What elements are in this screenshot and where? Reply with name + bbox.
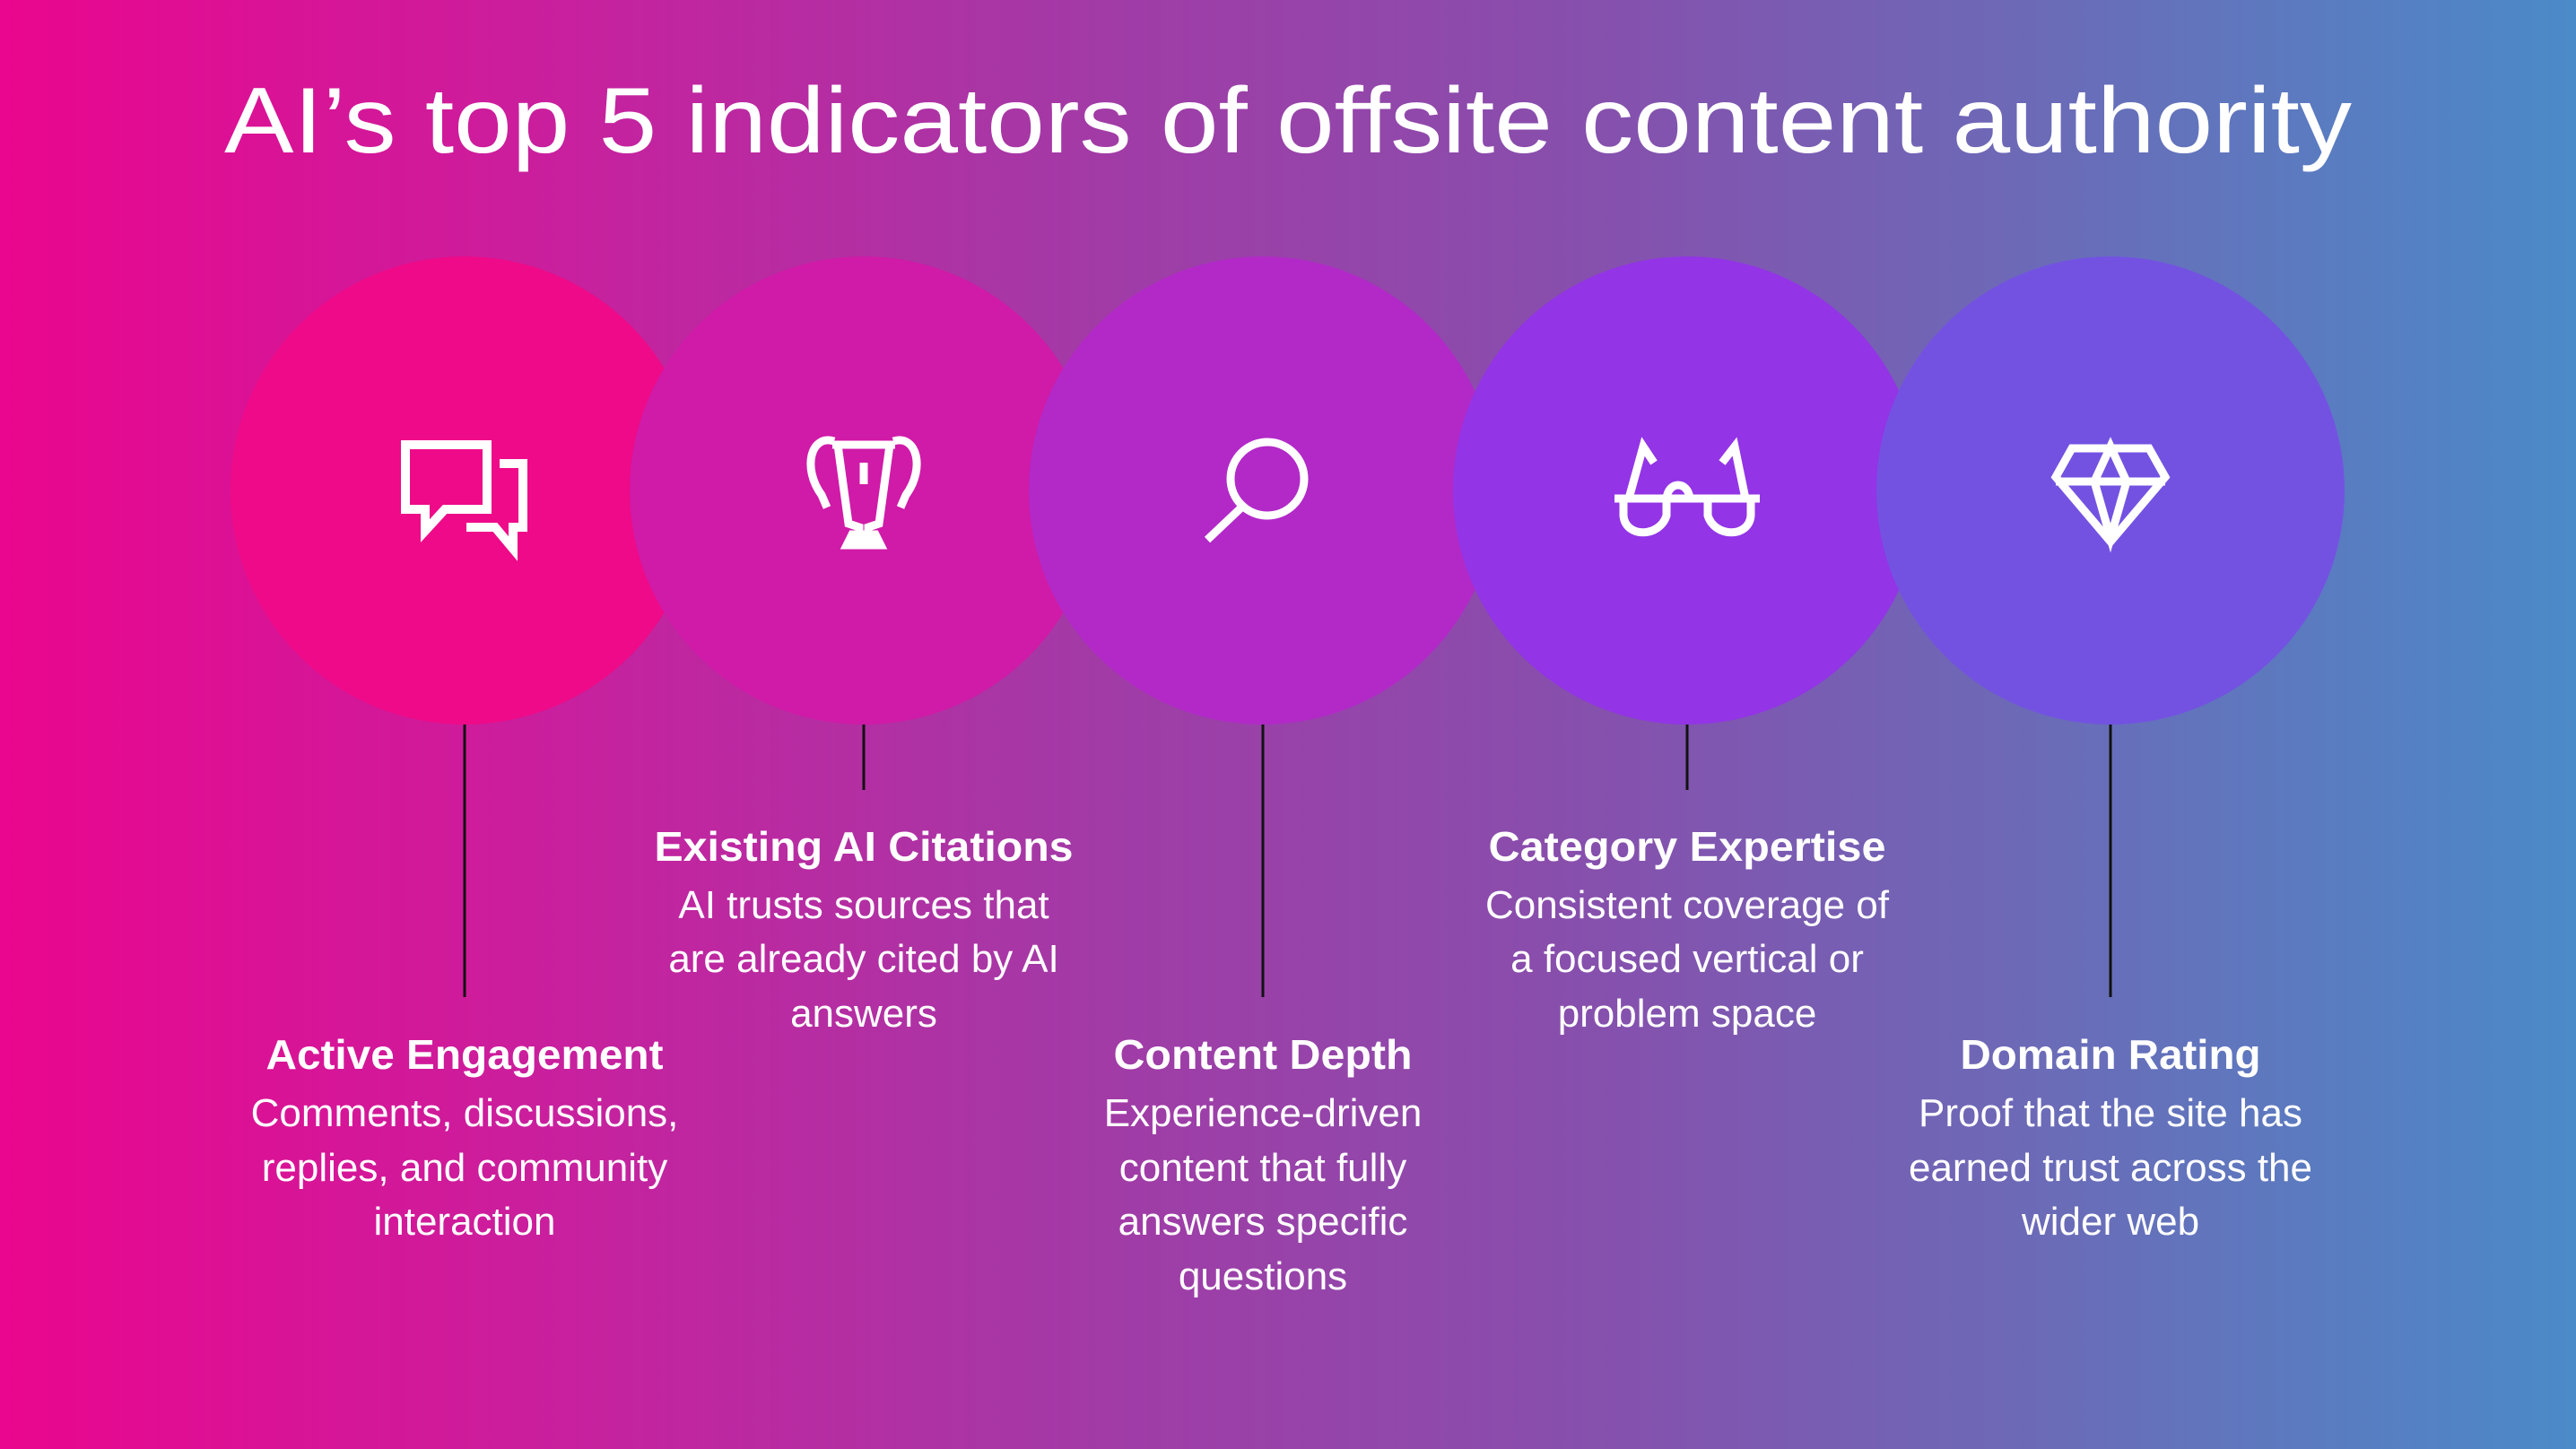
- connector lines: [465, 717, 2110, 997]
- circle 2: trophy icon: [630, 256, 1098, 724]
- item 5: Domain Rating: earned trust across the: [1909, 1146, 2312, 1190]
- item 3: Content Depth: Experience-driven: [1104, 1091, 1422, 1135]
- item 1: Active Engagement: [251, 1031, 678, 1244]
- circle 5: diamond icon: [1876, 256, 2345, 724]
- item 3: Content Depth: [1104, 1031, 1422, 1298]
- item 4: Category Expertise: Category Expertise: [1489, 823, 1885, 870]
- item 3: Content Depth: content that fully: [1119, 1146, 1406, 1190]
- item 3: Content Depth: questions: [1179, 1254, 1347, 1298]
- item 2: Existing AI Citations: Existing AI Citations: [655, 823, 1073, 870]
- circle 3: magnifier icon: [1029, 256, 1497, 724]
- circle 4: glasses icon: [1453, 256, 1921, 724]
- item 3: Content Depth: answers specific: [1118, 1200, 1407, 1244]
- item 5: Domain Rating: wider web: [2021, 1200, 2199, 1244]
- title: AI’s top 5 indicators of offsite content authority: [224, 69, 2352, 173]
- item 1: Active Engagement: interaction: [373, 1200, 556, 1244]
- item 4: Category Expertise: [1485, 823, 1890, 1036]
- item 5: Domain Rating: [1909, 1031, 2312, 1244]
- item 2: Existing AI Citations: answers: [790, 992, 937, 1036]
- item 3: Content Depth: Content Depth: [1114, 1031, 1412, 1078]
- item 4: Category Expertise: problem space: [1558, 992, 1816, 1036]
- item 2: Existing AI Citations: AI trusts sources that: [678, 883, 1049, 927]
- item 5: Domain Rating: Domain Rating: [1961, 1031, 2260, 1078]
- item 1: Active Engagement: Active Engagement: [265, 1031, 664, 1078]
- item 2: Existing AI Citations: [655, 823, 1073, 1036]
- item 4: Category Expertise: Consistent coverage of: [1485, 883, 1890, 927]
- item 1: Active Engagement: replies, and community: [262, 1146, 667, 1190]
- item 4: Category Expertise: a focused vertical or: [1510, 937, 1864, 981]
- item 1: Active Engagement: Comments, discussions,: [251, 1091, 678, 1135]
- circle 1: chat icon: [231, 256, 699, 724]
- item 5: Domain Rating: Proof that the site has: [1919, 1091, 2302, 1135]
- item 2: Existing AI Citations: are already cited by AI: [668, 937, 1059, 981]
